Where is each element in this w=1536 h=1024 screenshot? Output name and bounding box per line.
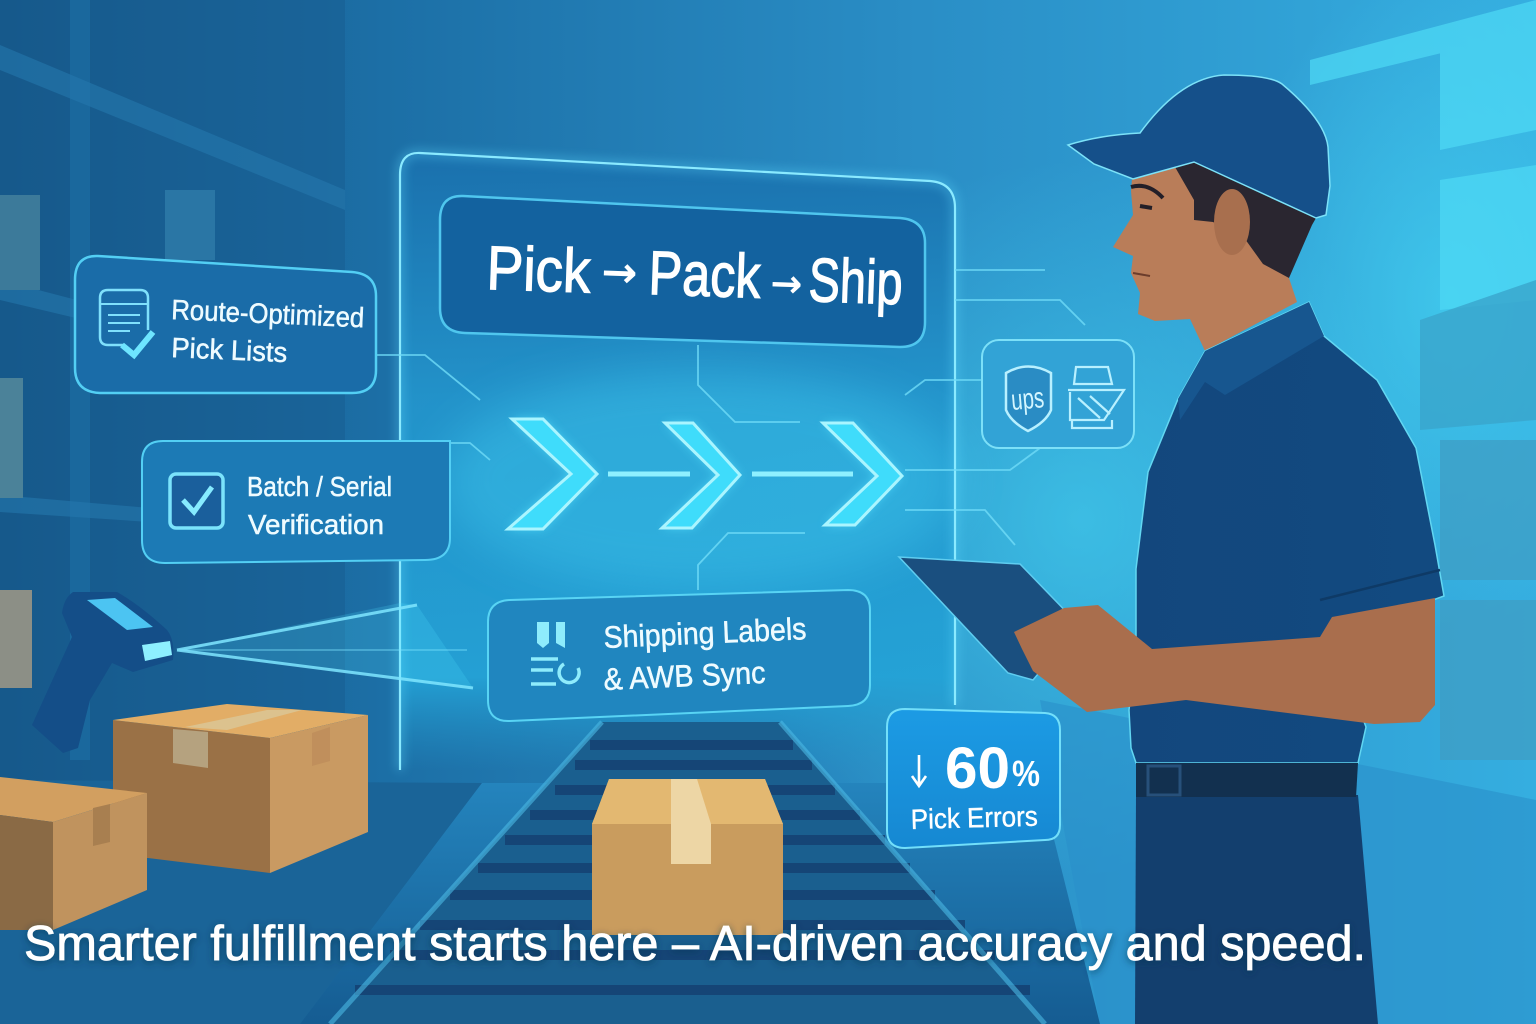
heading card: Pick Pack Ship bbox=[440, 196, 925, 347]
cardboard boxes bbox=[0, 704, 368, 930]
text: route-optimized pick lists: Pick Lists bbox=[171, 332, 288, 368]
text: route-optimized pick lists bbox=[171, 294, 365, 368]
icon: checklist document bbox=[100, 290, 153, 355]
card: shipping labels and AWB sync bbox=[488, 590, 870, 721]
belt bbox=[1136, 763, 1358, 797]
eye and brow bbox=[1131, 186, 1163, 208]
arm and hands bbox=[1014, 598, 1435, 724]
text: shipping labels and AWB sync bbox=[603, 611, 807, 697]
text: route-optimized pick lists: Route-Optimized bbox=[171, 294, 365, 333]
percent sign: % bbox=[1012, 753, 1040, 794]
heading text: Pick bbox=[486, 234, 593, 307]
trousers bbox=[1135, 795, 1378, 1024]
card: batch / serial verification bbox=[142, 441, 450, 563]
icon: labels and sync bbox=[531, 622, 579, 684]
icon: checkbox bbox=[170, 474, 223, 528]
shirt bbox=[1129, 302, 1444, 763]
cap bbox=[1068, 75, 1330, 218]
box: front bbox=[0, 777, 147, 930]
heading text: Pack bbox=[648, 239, 763, 312]
box: rear bbox=[113, 704, 368, 873]
ear bbox=[1214, 189, 1250, 255]
sleeve hem bbox=[1320, 570, 1440, 600]
heading text: → bbox=[770, 261, 803, 306]
icon: ups shield: ups bbox=[1010, 382, 1045, 417]
icon: ups shield bbox=[1006, 366, 1051, 431]
stat label: Pick Errors bbox=[910, 801, 1038, 835]
package on conveyor bbox=[592, 779, 783, 935]
main holographic panel bbox=[400, 153, 960, 770]
handheld barcode scanner bbox=[32, 592, 473, 753]
card: route-optimized pick lists bbox=[75, 256, 376, 393]
conveyor belt bbox=[330, 722, 1045, 1024]
caption: Smarter fulfillment starts here – AI-driven accuracy and speed. bbox=[24, 917, 1366, 971]
card: carrier logos bbox=[982, 340, 1134, 448]
icon: carrier parcel logo bbox=[1068, 367, 1124, 428]
circuit connector lines bbox=[376, 270, 1085, 590]
callout: 60% pick errors bbox=[887, 709, 1060, 848]
heading text: → bbox=[601, 247, 638, 297]
statistic: 60 bbox=[945, 736, 1010, 801]
hair bbox=[1175, 160, 1316, 278]
text: batch serial verification: Batch / Serial bbox=[247, 471, 392, 502]
heading text: Ship bbox=[808, 246, 904, 318]
tablet bbox=[899, 557, 1079, 680]
text: batch serial verification: Verification bbox=[248, 509, 384, 540]
neck and face bbox=[1113, 167, 1297, 351]
mouth bbox=[1133, 273, 1150, 276]
collar bbox=[1178, 302, 1324, 420]
text: shipping labels and AWB sync: Shipping Labels bbox=[603, 611, 807, 655]
text: shipping labels and AWB sync: & AWB Sync bbox=[603, 655, 766, 697]
icon: down arrow bbox=[912, 755, 926, 786]
worker figure bbox=[899, 75, 1444, 1024]
heading text bbox=[486, 234, 904, 318]
chevron flow arrows bbox=[508, 419, 902, 529]
text: batch serial verification bbox=[247, 471, 392, 540]
